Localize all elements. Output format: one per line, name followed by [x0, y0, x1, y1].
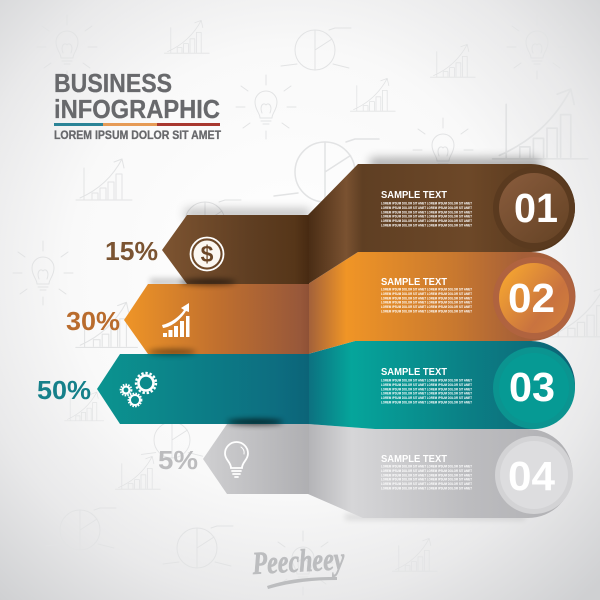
lorem 01: LOREM IPSUM DOLOR SIT AMET LOREM IPSUM DOLOR SIT AMET — [381, 202, 473, 206]
shadow on teal edge — [227, 419, 283, 425]
right band 04 — [308, 424, 572, 518]
lorem 02: LOREM IPSUM DOLOR SIT AMET LOREM IPSUM DOLOR SIT AMET — [381, 310, 473, 314]
right band 02 — [308, 252, 576, 354]
tricolour rule — [54, 123, 220, 126]
heading: business: BUSINESS — [54, 68, 172, 98]
percent 15: 15% — [105, 236, 158, 266]
panel: 04 grey — [158, 424, 573, 518]
lorem 04: LOREM IPSUM DOLOR SIT AMET LOREM IPSUM DOLOR SIT AMET — [381, 464, 473, 468]
number 02: 02 — [508, 275, 555, 321]
circle 01 — [493, 167, 575, 249]
sample text 04: SAMPLE TEXT — [381, 453, 448, 465]
number 01: 01 — [514, 185, 558, 231]
lorem 04: LOREM IPSUM DOLOR SIT AMET LOREM IPSUM DOLOR SIT AMET — [381, 469, 473, 473]
percent 30: 30% — [66, 306, 120, 336]
lorem 03: LOREM IPSUM DOLOR SIT AMET LOREM IPSUM DOLOR SIT AMET — [381, 396, 473, 400]
circle 03 — [493, 347, 575, 429]
icon: dollar coin — [190, 238, 224, 270]
lorem 04: LOREM IPSUM DOLOR SIT AMET LOREM IPSUM DOLOR SIT AMET — [381, 486, 473, 490]
shadow on orange edge — [148, 349, 196, 355]
left arrow 02 — [124, 284, 309, 354]
lorem 04: LOREM IPSUM DOLOR SIT AMET LOREM IPSUM DOLOR SIT AMET — [381, 478, 473, 482]
watermark logo — [251, 540, 346, 589]
icon: light bulb — [225, 442, 248, 477]
lorem 03: LOREM IPSUM DOLOR SIT AMET LOREM IPSUM DOLOR SIT AMET — [381, 392, 473, 396]
icon: gears — [120, 373, 156, 406]
right band 01 — [308, 164, 575, 284]
lorem 03: LOREM IPSUM DOLOR SIT AMET LOREM IPSUM DOLOR SIT AMET — [381, 383, 473, 387]
sample text 03: SAMPLE TEXT — [381, 366, 448, 378]
panel: 02 orange — [66, 252, 576, 355]
lorem 01: LOREM IPSUM DOLOR SIT AMET LOREM IPSUM DOLOR SIT AMET — [381, 206, 473, 210]
title block — [54, 68, 222, 142]
heading: infographic: iNFOGRAPHIC — [54, 94, 220, 124]
lorem 02 — [381, 288, 473, 314]
watermark logo: Peecheey — [251, 540, 346, 581]
lorem 04: LOREM IPSUM DOLOR SIT AMET LOREM IPSUM DOLOR SIT AMET — [381, 482, 473, 486]
lorem 03: LOREM IPSUM DOLOR SIT AMET LOREM IPSUM DOLOR SIT AMET — [381, 378, 473, 382]
lorem 02: LOREM IPSUM DOLOR SIT AMET LOREM IPSUM DOLOR SIT AMET — [381, 292, 473, 296]
lorem 01: LOREM IPSUM DOLOR SIT AMET LOREM IPSUM DOLOR SIT AMET — [381, 210, 473, 214]
lorem 04: LOREM IPSUM DOLOR SIT AMET LOREM IPSUM DOLOR SIT AMET — [381, 473, 473, 477]
left arrow 03 — [97, 354, 309, 424]
left arrow 01 — [162, 215, 309, 284]
lorem 04 — [381, 464, 473, 490]
sample text 01: SAMPLE TEXT — [381, 189, 448, 201]
sample text 02: SAMPLE TEXT — [381, 276, 448, 288]
lorem 02: LOREM IPSUM DOLOR SIT AMET LOREM IPSUM DOLOR SIT AMET — [381, 288, 473, 292]
percent 50: 50% — [37, 375, 91, 405]
percent 5: 5% — [158, 445, 198, 475]
lorem 02: LOREM IPSUM DOLOR SIT AMET LOREM IPSUM DOLOR SIT AMET — [381, 301, 473, 305]
lorem 01: LOREM IPSUM DOLOR SIT AMET LOREM IPSUM DOLOR SIT AMET — [381, 224, 473, 228]
lorem 01: LOREM IPSUM DOLOR SIT AMET LOREM IPSUM DOLOR SIT AMET — [381, 215, 473, 219]
drop shadows — [150, 158, 540, 520]
number 04: 04 — [508, 453, 555, 499]
lorem 02: LOREM IPSUM DOLOR SIT AMET LOREM IPSUM DOLOR SIT AMET — [381, 296, 473, 300]
circle 04 — [495, 436, 573, 514]
icon: growth chart — [162, 303, 190, 337]
icon: dollar coin: $ — [201, 241, 214, 267]
subtitle: LOREM IPSUM DOLOR SIT AMET — [54, 128, 222, 142]
lorem 03: LOREM IPSUM DOLOR SIT AMET LOREM IPSUM DOLOR SIT AMET — [381, 387, 473, 391]
lorem 02: LOREM IPSUM DOLOR SIT AMET LOREM IPSUM DOLOR SIT AMET — [381, 305, 473, 309]
circle 02 — [493, 257, 575, 339]
shadow on brown edge — [180, 279, 236, 285]
panel: 01 brown — [105, 164, 575, 285]
lorem 03: LOREM IPSUM DOLOR SIT AMET LOREM IPSUM DOLOR SIT AMET — [381, 400, 473, 404]
left arrow 04 — [203, 424, 309, 494]
lorem 01 — [381, 202, 473, 228]
lorem 03 — [381, 378, 473, 404]
number 03: 03 — [509, 364, 555, 410]
right band 03 — [308, 341, 575, 429]
panel: 03 teal — [37, 341, 575, 429]
lorem 01: LOREM IPSUM DOLOR SIT AMET LOREM IPSUM DOLOR SIT AMET — [381, 219, 473, 223]
